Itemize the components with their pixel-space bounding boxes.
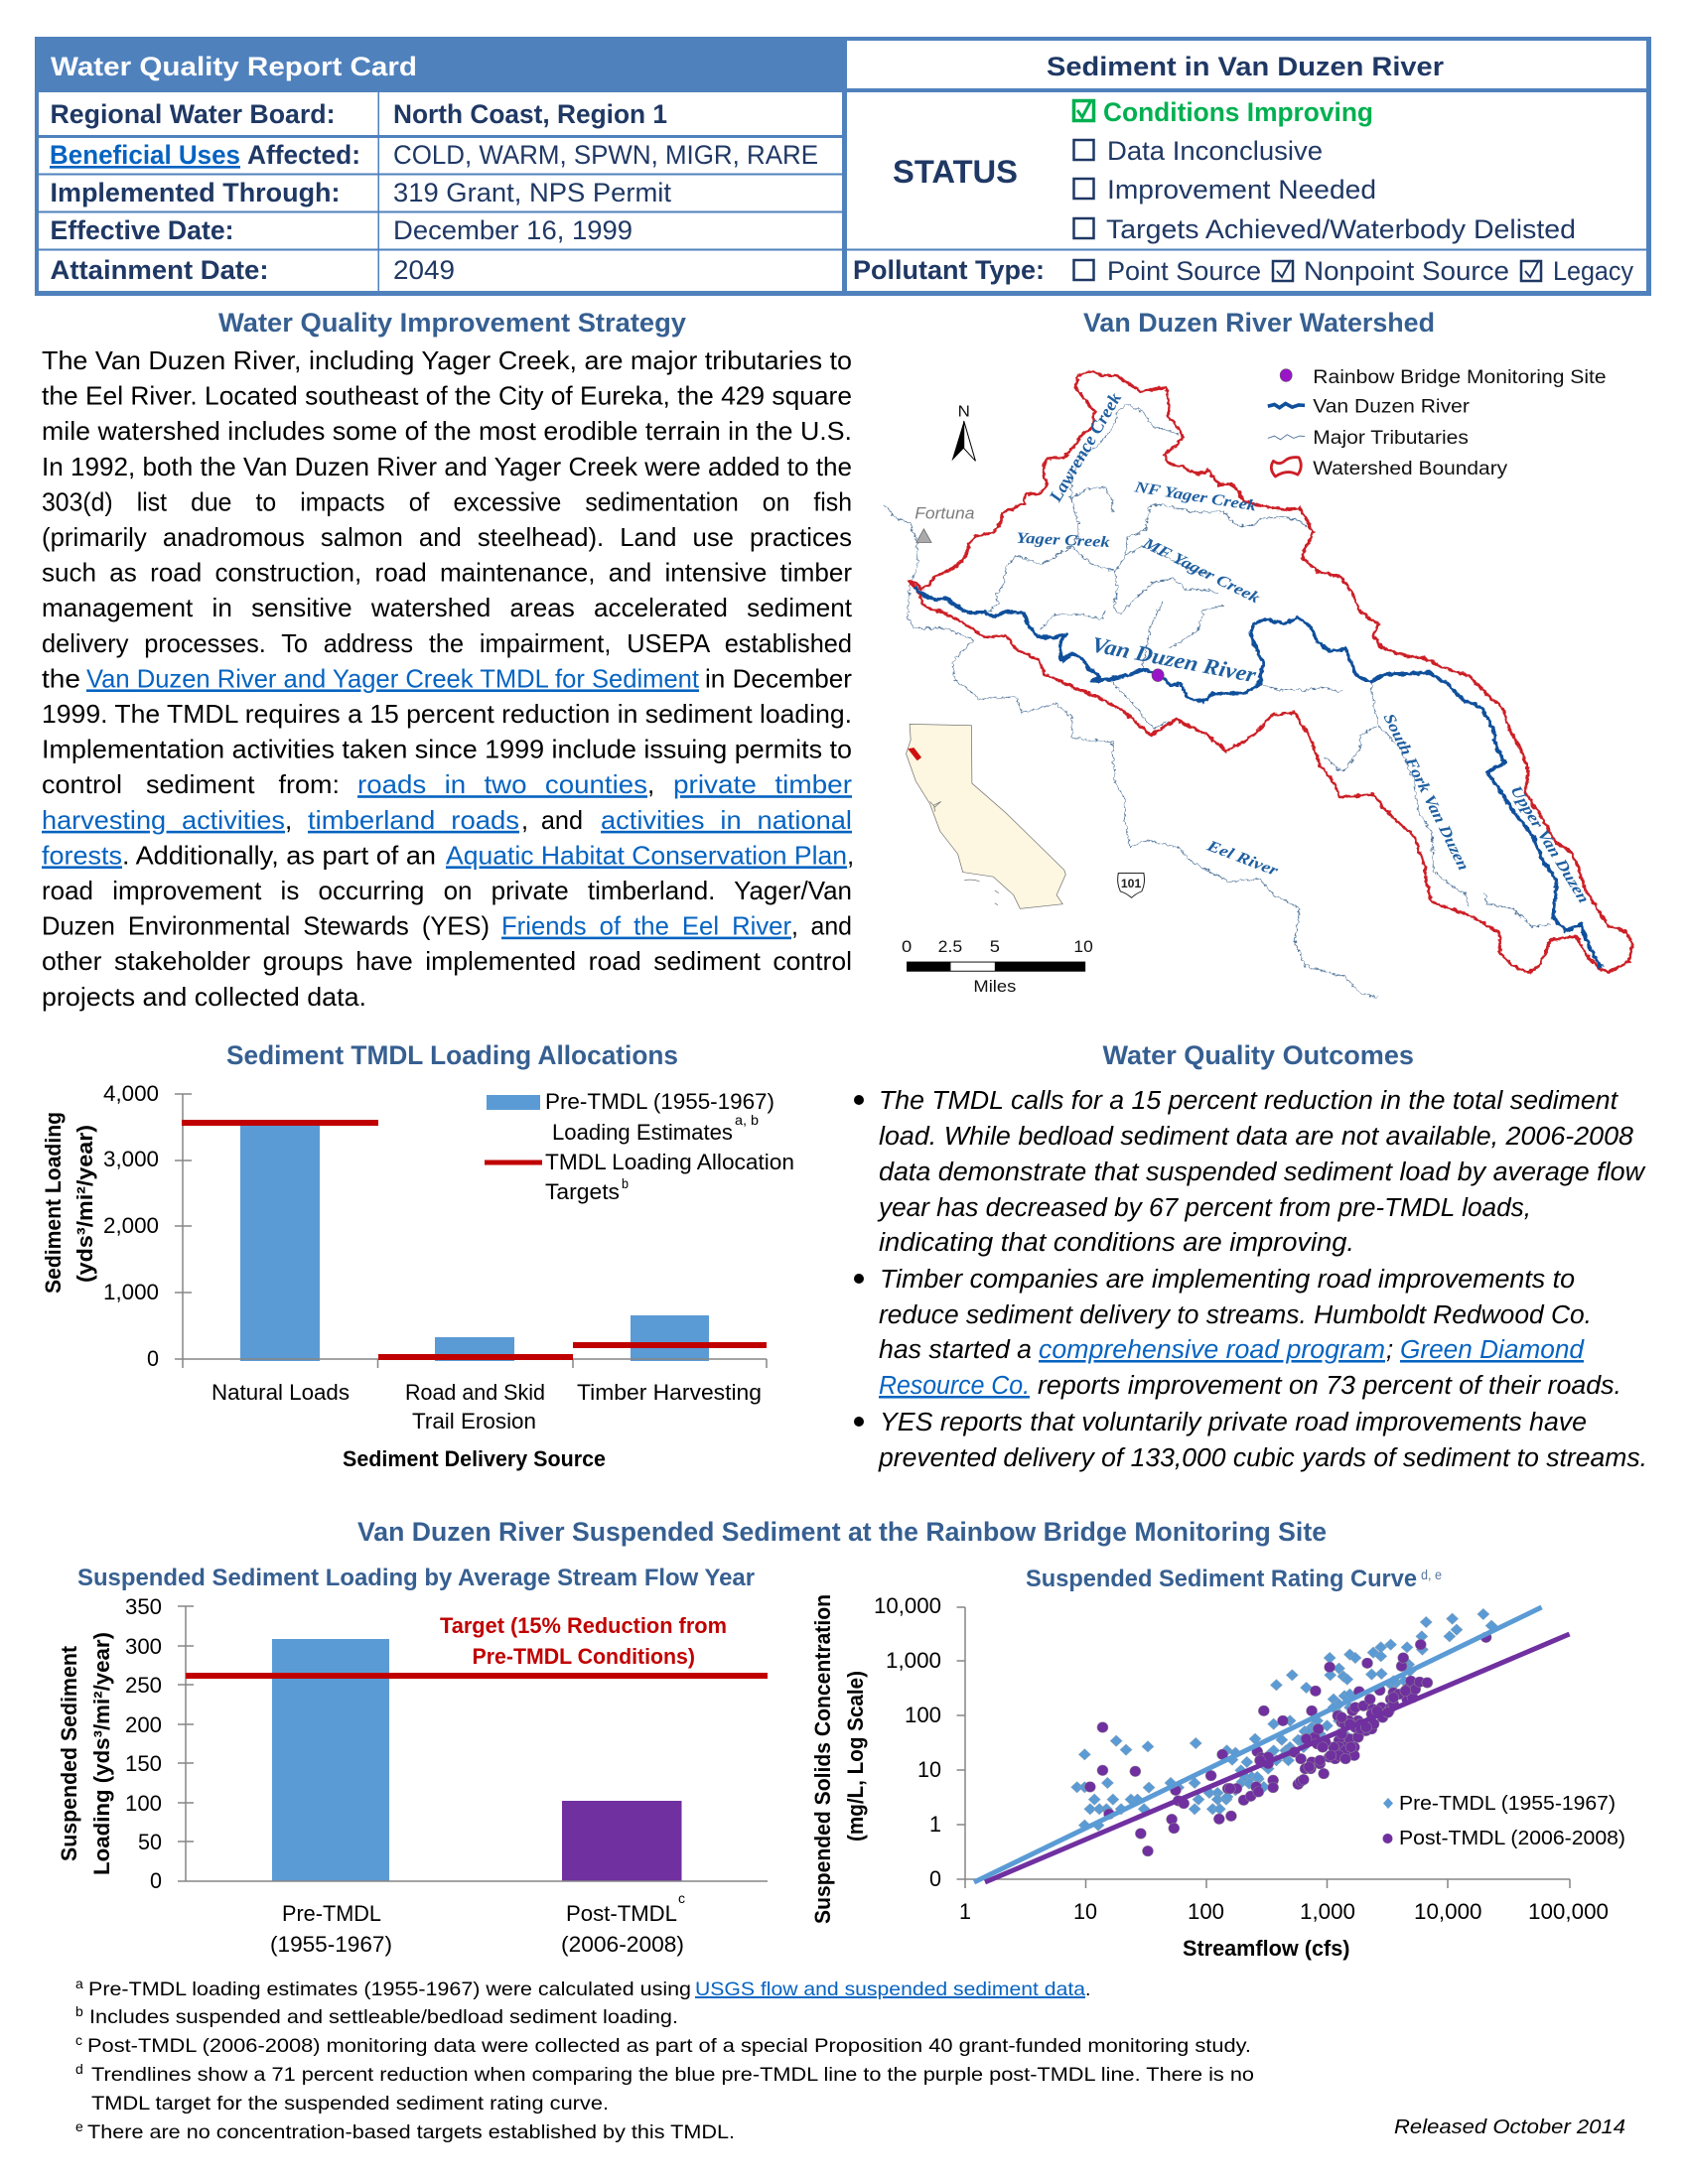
pre-TMDL points bbox=[1077, 1614, 1491, 1826]
outcomes bullet list: has started a bbox=[879, 1336, 1032, 1364]
map: stream labels: Eel River bbox=[1203, 836, 1282, 880]
strategy paragraph: , bbox=[647, 769, 654, 799]
target line bbox=[186, 1673, 768, 1679]
release date: Released October 2014 bbox=[1394, 2116, 1625, 2138]
map: scale bar: 10 bbox=[1073, 937, 1093, 956]
y axis labels: 250 bbox=[125, 1673, 162, 1698]
footnotes: Trendlines show a 71 percent reduction when comparing the blue pre-TMDL line to the purple post-TMDL line. There is no bbox=[91, 2064, 1254, 2086]
strategy paragraph: harvesting activities bbox=[42, 805, 285, 835]
strategy paragraph: roads in two counties bbox=[357, 769, 647, 799]
field values: 2049 bbox=[393, 255, 455, 285]
field labels: Regional Water Board: bbox=[50, 99, 336, 129]
y axis labels: 50 bbox=[138, 1830, 162, 1854]
map: scale bar: 5 bbox=[990, 937, 1000, 956]
category labels: Natural Loads bbox=[211, 1380, 350, 1405]
y axis title: (yds³/mi²/year) bbox=[72, 1125, 97, 1283]
map: highway shield: 101 bbox=[1121, 878, 1141, 890]
heading: outcomes: Water Quality Outcomes bbox=[1102, 1040, 1414, 1070]
pollutant type row: Nonpoint Source bbox=[1304, 256, 1509, 286]
outcomes bullet list: Resource Co. bbox=[879, 1372, 1030, 1400]
y axis labels bbox=[103, 1081, 159, 1371]
strategy paragraph: other stakeholder groups have implemented road sediment control bbox=[42, 946, 852, 976]
strategy paragraph: 1999. The TMDL requires a 15 percent reduction in sediment loading. bbox=[42, 699, 852, 729]
category labels: (2006-2008) bbox=[561, 1932, 684, 1957]
y axis title bbox=[57, 1632, 114, 1875]
subheading: rating curve: d, e bbox=[1421, 1567, 1442, 1582]
strategy paragraph: projects and collected data. bbox=[42, 982, 366, 1012]
category labels: Timber Harvesting bbox=[577, 1380, 762, 1405]
y axis labels: 4,000 bbox=[103, 1081, 159, 1106]
strategy paragraph: the bbox=[42, 663, 80, 693]
legend: TMDL Loading Allocation bbox=[545, 1150, 794, 1174]
map: watershed boundary bbox=[909, 370, 1632, 973]
map: tributaries bbox=[885, 405, 1551, 998]
strategy paragraph: In 1992, both the Van Duzen River and Yager Creek were added to the bbox=[42, 452, 852, 481]
outcomes bullet list: YES reports that voluntarily private road improvements have bbox=[880, 1409, 1587, 1436]
target label: Target (15% Reduction from bbox=[440, 1613, 727, 1638]
category labels bbox=[211, 1380, 762, 1433]
field labels bbox=[50, 99, 360, 285]
heading: suspended sediment section: Van Duzen River Suspended Sediment at the Rainbow Bridge Monitoring Site bbox=[357, 1517, 1327, 1547]
map: legend: Rainbow Bridge Monitoring Site bbox=[1313, 366, 1607, 388]
target label: Pre-TMDL Conditions) bbox=[473, 1644, 695, 1669]
heading: watershed: Van Duzen River Watershed bbox=[1083, 308, 1435, 338]
map: north arrow: N bbox=[958, 403, 970, 420]
field labels: Affected: bbox=[247, 140, 360, 170]
map: legend: Major Tributaries bbox=[1313, 427, 1469, 449]
pollutant type row bbox=[853, 255, 1634, 286]
strategy paragraph: , and bbox=[791, 911, 852, 941]
y axis title bbox=[810, 1594, 868, 1924]
card title: Water Quality Report Card bbox=[51, 52, 417, 81]
pre-TMDL trendline bbox=[974, 1607, 1542, 1882]
footnotes: USGS flow and suspended sediment data bbox=[695, 1979, 1085, 2000]
legend: b bbox=[622, 1175, 629, 1191]
map: stream labels: MF Yager Creek bbox=[1139, 533, 1264, 607]
map: Fortuna bbox=[914, 504, 975, 543]
bar: post-TMDL bbox=[562, 1801, 681, 1881]
strategy paragraph: forests bbox=[42, 840, 122, 870]
target lines: TMDL allocation bbox=[182, 1120, 767, 1360]
y axis labels: 150 bbox=[125, 1751, 162, 1776]
strategy paragraph: Van Duzen River and Yager Creek TMDL for Sediment bbox=[86, 663, 700, 693]
status: improvement needed: Improvement Needed bbox=[1107, 175, 1376, 205]
footnotes: b bbox=[75, 2003, 83, 2019]
watershed map bbox=[885, 366, 1632, 998]
x axis labels bbox=[959, 1899, 1609, 1924]
category labels: (1955-1967) bbox=[270, 1932, 392, 1957]
x axis title: Sediment Delivery Source bbox=[343, 1446, 606, 1471]
heading: improvement strategy: Water Quality Improvement Strategy bbox=[218, 308, 686, 338]
y axis title: Suspended Solids Concentration bbox=[810, 1594, 835, 1924]
strategy paragraph: Duzen Environmental Stewards (YES) bbox=[42, 911, 490, 941]
legend: Pre-TMDL (1955-1967) bbox=[1399, 1792, 1616, 1815]
map: California inset bbox=[907, 724, 1065, 908]
y axis labels: 0 bbox=[147, 1346, 159, 1371]
x axis labels: 10,000 bbox=[1414, 1899, 1481, 1924]
strategy paragraph: timberland roads bbox=[308, 805, 519, 835]
y axis labels: 10 bbox=[917, 1757, 941, 1782]
y axis labels: 200 bbox=[125, 1712, 162, 1737]
strategy paragraph: delivery processes. To address the impairment, USEPA established bbox=[42, 628, 852, 658]
target label bbox=[440, 1613, 727, 1669]
card subject: Sediment in Van Duzen River bbox=[1047, 52, 1444, 81]
map: stream labels: South Fork Van Duzen bbox=[1379, 712, 1473, 873]
y axis title: Suspended Sediment bbox=[57, 1645, 81, 1861]
strategy paragraph: such as road construction, road maintenance, and intensive timber bbox=[42, 558, 852, 588]
map: legend bbox=[1268, 366, 1607, 479]
pollutant type row: Legacy bbox=[1553, 256, 1634, 286]
strategy paragraph bbox=[42, 345, 854, 1012]
legend: Post-TMDL (2006-2008) bbox=[1399, 1827, 1625, 1849]
outcomes bullet list bbox=[854, 1087, 1647, 1472]
map: highway shield bbox=[1118, 874, 1145, 897]
map: scale bar bbox=[902, 937, 1093, 996]
map: stream labels: Van Duzen River bbox=[1089, 632, 1259, 688]
y axis labels: 3,000 bbox=[103, 1147, 159, 1171]
strategy paragraph: mile watershed includes some of the most erodible terrain in the U.S. bbox=[42, 416, 852, 446]
strategy paragraph: road improvement is occurring on private timberland. Yager/Van bbox=[42, 876, 852, 905]
map: stream labels: Yager Creek bbox=[1016, 528, 1111, 551]
category labels: Road and Skid bbox=[405, 1380, 545, 1405]
strategy paragraph: Aquatic Habitat Conservation Plan bbox=[446, 840, 847, 870]
outcomes bullet list: indicating that conditions are improving. bbox=[879, 1229, 1354, 1257]
post-TMDL trendline bbox=[985, 1634, 1570, 1882]
map: north arrow bbox=[951, 403, 975, 461]
post-TMDL points bbox=[1090, 1637, 1486, 1851]
strategy paragraph: (primarily anadromous salmon and steelhead). Land use practices bbox=[42, 522, 852, 552]
category labels bbox=[270, 1890, 685, 1957]
outcomes bullet list: prevented delivery of 133,000 cubic yards of sediment to streams. bbox=[878, 1444, 1647, 1472]
x axis labels: 100,000 bbox=[1528, 1899, 1609, 1924]
report card header table bbox=[35, 37, 1651, 296]
category labels: Post-TMDL bbox=[566, 1901, 677, 1926]
map: Van Duzen River bbox=[914, 588, 1602, 968]
bars: pre-TMDL loading bbox=[240, 1125, 709, 1361]
map: legend: Watershed Boundary bbox=[1313, 458, 1508, 479]
outcomes bullet list: reduce sediment delivery to streams. Humboldt Redwood Co. bbox=[879, 1301, 1592, 1329]
field labels: Beneficial Uses bbox=[50, 140, 240, 170]
bar chart: sediment TMDL loading allocations bbox=[41, 1081, 794, 1471]
field values bbox=[393, 99, 818, 285]
footnotes: d bbox=[75, 2061, 83, 2077]
map: stream labels bbox=[1016, 389, 1593, 906]
x axis labels: 1 bbox=[959, 1899, 971, 1924]
y axis labels: 1,000 bbox=[103, 1280, 159, 1304]
strategy paragraph: management in sensitive watershed areas accelerated sediment bbox=[42, 593, 853, 622]
strategy paragraph: , bbox=[847, 840, 854, 870]
y axis labels: 1 bbox=[929, 1812, 941, 1837]
strategy paragraph: private timber bbox=[673, 769, 852, 799]
footnotes: Pre-TMDL loading estimates (1955-1967) were calculated using bbox=[88, 1979, 691, 2000]
map: Fortuna: Fortuna bbox=[914, 504, 975, 522]
category labels: Pre-TMDL bbox=[282, 1901, 381, 1926]
map: scale bar: 2.5 bbox=[938, 937, 962, 956]
footnotes: e bbox=[75, 2118, 83, 2134]
heading: loading allocations: Sediment TMDL Loading Allocations bbox=[226, 1040, 678, 1070]
footnotes bbox=[75, 1976, 1254, 2143]
footnotes: Post-TMDL (2006-2008) monitoring data were collected as part of a special Proposition 40 grant-funded monitoring study. bbox=[87, 2035, 1251, 2057]
footnotes: TMDL target for the suspended sediment rating curve. bbox=[91, 2093, 609, 2115]
subheading: loading chart: Suspended Sediment Loading by Average Stream Flow Year bbox=[77, 1565, 755, 1591]
x axis labels: 1,000 bbox=[1300, 1899, 1355, 1924]
strategy paragraph: in December bbox=[705, 663, 852, 693]
footnotes: There are no concentration-based targets established by this TMDL. bbox=[87, 2121, 735, 2143]
status: targets achieved: Targets Achieved/Waterbody Delisted bbox=[1106, 214, 1576, 244]
field values: COLD, WARM, SPWN, MIGR, RARE bbox=[393, 140, 818, 170]
legend bbox=[485, 1089, 794, 1204]
strategy paragraph: 303(d) list due to impacts of excessive sedimentation on fish bbox=[42, 486, 852, 516]
y axis title: Sediment Loading bbox=[41, 1112, 66, 1294]
x axis title: Streamflow (cfs) bbox=[1183, 1936, 1350, 1961]
map: stream labels: NF Yager Creek bbox=[1132, 478, 1259, 514]
outcomes bullet list: Green Diamond bbox=[1400, 1336, 1585, 1364]
map: scale bar: Miles bbox=[973, 977, 1017, 996]
field values: 319 Grant, NPS Permit bbox=[393, 178, 672, 207]
category labels: c bbox=[678, 1890, 685, 1906]
y axis labels: 100 bbox=[125, 1791, 162, 1816]
field labels: Attainment Date: bbox=[50, 255, 268, 285]
outcomes bullet list: Timber companies are implementing road improvements to bbox=[880, 1266, 1575, 1294]
y axis labels: 300 bbox=[125, 1634, 162, 1659]
field values: North Coast, Region 1 bbox=[393, 99, 667, 129]
y axis labels: 10,000 bbox=[874, 1593, 941, 1618]
strategy paragraph: , and bbox=[521, 805, 583, 835]
category labels: Trail Erosion bbox=[412, 1409, 536, 1433]
subheading: rating curve: Suspended Sediment Rating Curve bbox=[1026, 1566, 1417, 1592]
legend: a, b bbox=[735, 1112, 759, 1128]
map: stream labels: Lawrence Creek bbox=[1044, 389, 1126, 505]
outcomes bullet list: load. While bedload sediment data are not available, 2006-2008 bbox=[879, 1123, 1634, 1151]
field labels: Effective Date: bbox=[50, 215, 234, 245]
y axis labels bbox=[874, 1593, 941, 1891]
strategy paragraph: Friends of the Eel River bbox=[501, 911, 791, 941]
outcomes bullet list: ; bbox=[1386, 1336, 1393, 1364]
strategy paragraph: , bbox=[285, 805, 292, 835]
x axis labels: 100 bbox=[1188, 1899, 1224, 1924]
y axis title: Loading (yds³/mi²/year) bbox=[89, 1632, 114, 1875]
y axis title: (mg/L, Log Scale) bbox=[843, 1671, 868, 1842]
legend: Loading Estimates bbox=[552, 1120, 733, 1145]
legend: Targets bbox=[545, 1179, 620, 1204]
x axis labels: 10 bbox=[1073, 1899, 1097, 1924]
y axis labels bbox=[125, 1594, 162, 1893]
legend bbox=[1382, 1792, 1625, 1849]
y axis labels: 100 bbox=[905, 1703, 941, 1727]
footnotes: . bbox=[1085, 1979, 1090, 2000]
bar: pre-TMDL bbox=[272, 1639, 389, 1881]
map: scale bar: 0 bbox=[902, 937, 912, 956]
strategy paragraph: Implementation activities taken since 1999 include issuing permits to bbox=[42, 735, 852, 764]
strategy paragraph: the Eel River. Located southeast of the City of Eureka, the 429 square bbox=[42, 381, 852, 411]
footnotes: c bbox=[75, 2032, 82, 2048]
outcomes bullet list: The TMDL calls for a 15 percent reduction in the total sediment bbox=[879, 1087, 1618, 1115]
legend: Pre-TMDL (1955-1967) bbox=[545, 1089, 774, 1114]
pollutant type row: Pollutant Type: bbox=[853, 255, 1045, 285]
strategy paragraph: activities in national bbox=[601, 805, 852, 835]
y axis labels: 1,000 bbox=[886, 1648, 941, 1673]
outcomes bullet list: reports improvement on 73 percent of their roads. bbox=[1038, 1372, 1621, 1400]
bar chart: suspended sediment loading bbox=[57, 1594, 768, 1957]
strategy paragraph: control sediment from: bbox=[42, 769, 340, 799]
status: data inconclusive: Data Inconclusive bbox=[1107, 136, 1323, 166]
y axis labels: 350 bbox=[125, 1594, 162, 1619]
footnotes: Includes suspended and settleable/bedload sediment loading. bbox=[89, 2006, 678, 2028]
strategy paragraph: The Van Duzen River, including Yager Creek, are major tributaries to bbox=[42, 345, 852, 375]
status: conditions improving checked: Conditions Improving bbox=[1103, 97, 1373, 127]
status label: STATUS bbox=[893, 154, 1018, 190]
map: monitoring site bbox=[1152, 669, 1164, 682]
pollutant type row: Point Source bbox=[1107, 256, 1261, 286]
outcomes bullet list: data demonstrate that suspended sediment load by average flow bbox=[879, 1159, 1646, 1186]
y axis labels: 0 bbox=[929, 1866, 941, 1891]
scatter chart: suspended sediment rating curve bbox=[810, 1593, 1625, 1961]
strategy paragraph: . Additionally, as part of an bbox=[122, 840, 436, 870]
field values: December 16, 1999 bbox=[393, 215, 633, 245]
map: stream labels: Upper Van Duzen bbox=[1506, 783, 1593, 906]
map: legend: Van Duzen River bbox=[1313, 396, 1470, 417]
outcomes bullet list: year has decreased by 67 percent from pre-TMDL loads, bbox=[877, 1194, 1531, 1222]
outcomes bullet list: comprehensive road program bbox=[1039, 1336, 1385, 1364]
footnotes: a bbox=[75, 1976, 83, 1991]
field labels: Implemented Through: bbox=[50, 178, 340, 207]
y axis labels: 0 bbox=[150, 1868, 162, 1893]
y axis title bbox=[41, 1112, 97, 1294]
y axis labels: 2,000 bbox=[103, 1213, 159, 1238]
